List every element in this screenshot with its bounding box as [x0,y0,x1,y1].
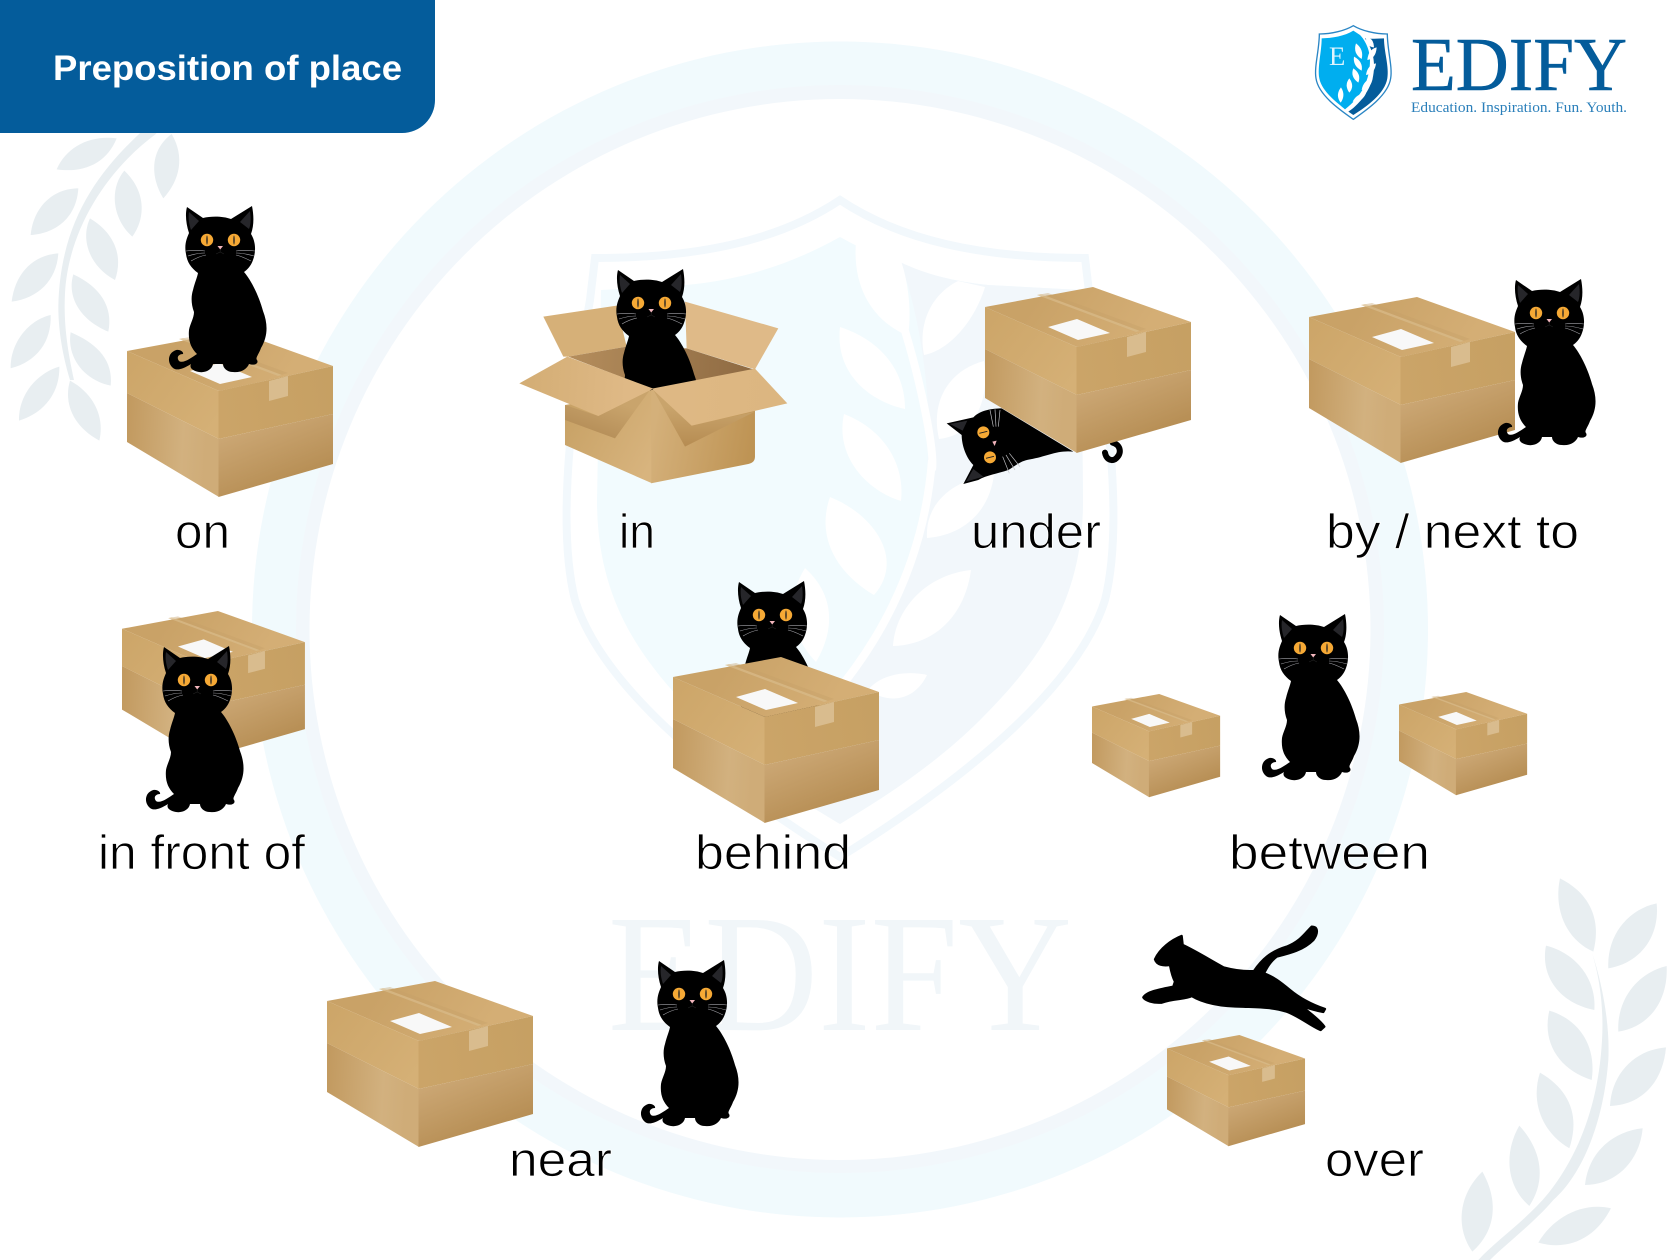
background watermark: shield [567,200,1113,857]
title banner [0,0,435,133]
title banner: Preposition of place [53,49,402,88]
label: over: over [1325,1134,1424,1187]
scene: over [1143,927,1424,1187]
icon: jumping cat [1143,927,1325,1030]
label: by / next to: by / next to [1326,506,1579,559]
label: near: near [509,1134,612,1187]
label: on: on [175,506,230,559]
background watermark: EDIFY wordmark: EDIFY [608,881,1072,1067]
scene: under [947,287,1191,559]
scene: by / next to [1309,279,1596,559]
logo wordmark: EDIFY [1411,23,1627,107]
scene: behind [673,581,879,880]
logo tagline: Education. Inspiration. Fun. Youth. [1411,100,1627,116]
decorative branch: bottom right [1462,878,1667,1260]
label: between: between [1229,827,1430,880]
scene: in front of [98,611,306,880]
scene: on [127,206,333,559]
label: behind: behind [695,827,851,880]
icon: logo shield [1316,26,1391,119]
logo: EDIFY [1316,23,1627,119]
icon: logo shield: E [1329,41,1345,71]
scene: between [1092,614,1527,880]
label: in front of: in front of [98,827,306,880]
decorative branch: top left [11,130,179,441]
label: in: in [619,506,655,559]
scene: in [519,269,787,559]
background watermark: circle ring [252,42,1428,1218]
label: under: under [971,506,1101,559]
scene: near [327,960,739,1187]
